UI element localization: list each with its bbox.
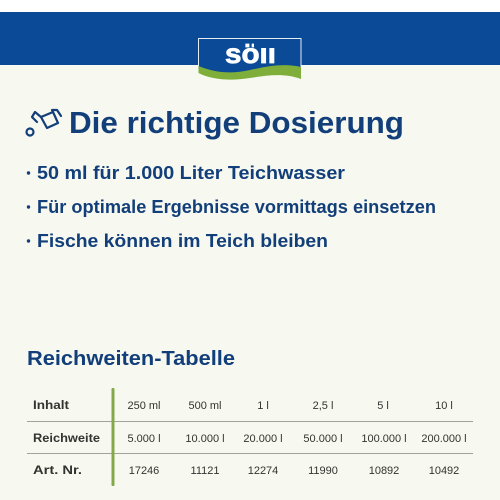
row: Reichweite: Reichweite xyxy=(33,433,100,445)
row: Reichweite xyxy=(33,433,467,445)
icon: dosing cap with drop xyxy=(26,110,61,136)
row: Inhalt xyxy=(33,400,453,412)
logo: Söll xyxy=(198,38,301,80)
bullet 2: Für optimale Ergebnisse vormittags einsetzen xyxy=(37,197,436,217)
logo: Söll: söll xyxy=(225,38,276,69)
table heading: Reichweiten-Tabelle xyxy=(27,348,235,370)
row: Reichweite: 100.000 l xyxy=(361,433,407,445)
row: Art. Nr.: 11990 xyxy=(308,465,338,477)
row: Reichweite: 50.000 l xyxy=(303,433,343,445)
row: Inhalt: 2,5 l xyxy=(313,400,333,412)
row: Inhalt: 10 l xyxy=(435,400,453,412)
row: Art. Nr.: 17246 xyxy=(129,465,159,477)
title: Die richtige Dosierung xyxy=(69,105,404,140)
row: Art. Nr.: 10492 xyxy=(429,465,459,477)
row: Reichweite: 10.000 l xyxy=(185,433,225,445)
header band xyxy=(0,12,500,65)
row: Inhalt: 5 l xyxy=(377,400,389,412)
row: Reichweite: 20.000 l xyxy=(243,433,283,445)
row: Inhalt: Inhalt xyxy=(33,400,69,412)
row: Reichweite: 5.000 l xyxy=(127,433,161,445)
coverage table xyxy=(27,388,473,486)
row: Inhalt: 250 ml xyxy=(127,400,161,412)
row: Inhalt: 500 ml xyxy=(188,400,222,412)
row: Art. Nr.: 11121 xyxy=(191,465,219,477)
row: Art. Nr.: Art. Nr. xyxy=(33,465,82,477)
row: Inhalt: 1 l xyxy=(257,400,269,412)
row: Art. Nr.: 12274 xyxy=(248,465,278,477)
row: Art. Nr.: 10892 xyxy=(369,465,399,477)
bullet 3: Fische können im Teich bleiben xyxy=(37,231,328,251)
bullet 1: 50 ml für 1.000 Liter Teichwasser xyxy=(37,163,345,183)
row: Reichweite: 200.000 l xyxy=(421,433,467,445)
row: Art. Nr. xyxy=(33,465,459,477)
dosage bullet list xyxy=(27,163,436,251)
